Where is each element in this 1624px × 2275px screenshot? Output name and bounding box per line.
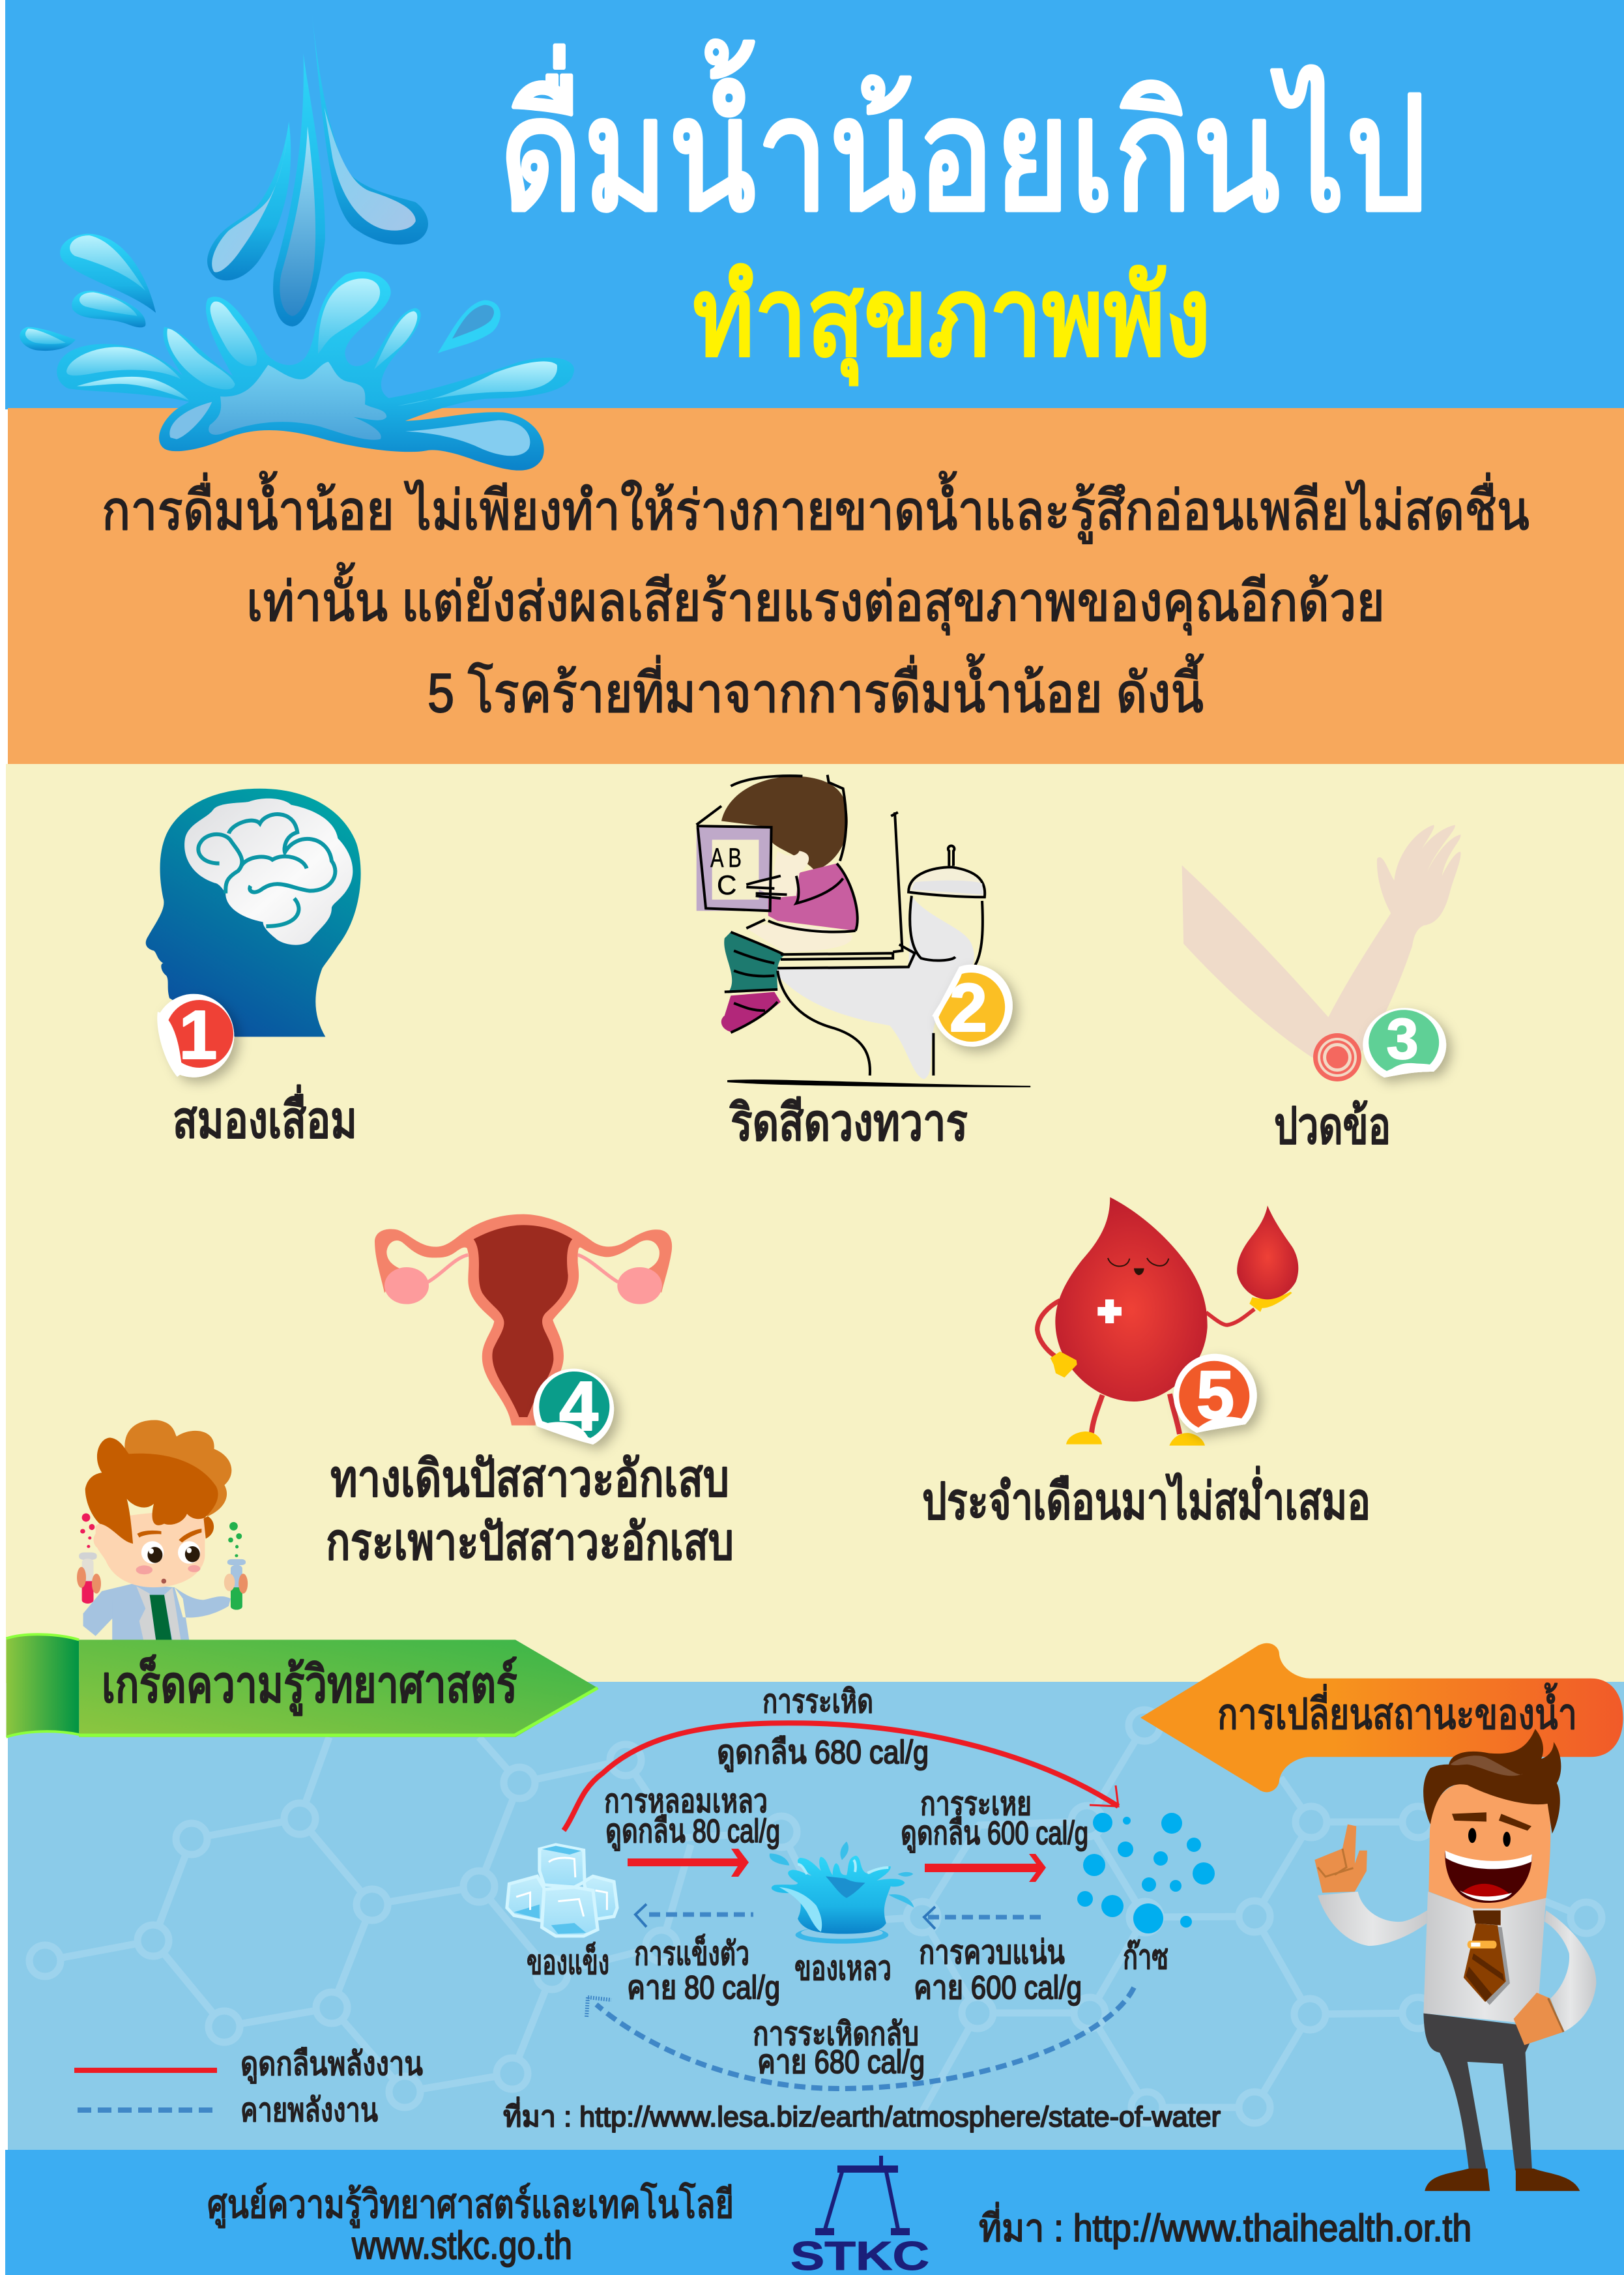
green science-fact banner	[7, 1634, 598, 1737]
icon: gas dots	[1077, 1813, 1215, 1933]
label: dementia: สมองเสื่อม	[173, 1085, 357, 1149]
diagram: melting arrow	[628, 1849, 749, 1877]
source text: ที่มา : http://www.lesa.biz/earth/atmosphere/state-of-water	[503, 2096, 1221, 2133]
diagram text: condensation: คาย 600 cal/g	[914, 1969, 1082, 2006]
background: light blue science panel	[8, 1682, 1624, 2151]
footer: organization name and website	[207, 2182, 734, 2267]
diagram: deposition dashed curve	[587, 1988, 1134, 2089]
background: cream disease panel	[6, 764, 1624, 1683]
icon: aching arm	[1182, 825, 1460, 1061]
icon: joint pain target	[1313, 1033, 1361, 1081]
diagram text: vaporization	[901, 1785, 1088, 1853]
icon: ice cubes	[507, 1845, 617, 1936]
badge 1: 1	[179, 997, 217, 1074]
badge 1	[157, 994, 234, 1078]
label: irregular menstruation: ประจำเดือนมาไม่สม่ำเสมอ	[922, 1467, 1370, 1530]
diagram: freezing dashed arrow	[635, 1904, 753, 1927]
diagram text: deposition: การระเหิดกลับ	[753, 2016, 919, 2052]
label: solid: ของแข็ง	[527, 1943, 609, 1982]
diagram text: melting: การหลอมเหลว	[604, 1783, 768, 1819]
diagram text: deposition: คาย 680 cal/g	[757, 2044, 925, 2080]
legend: คายพลังงาน	[240, 2092, 378, 2128]
diagram text: sublimation: ดูดกลืน 680 cal/g	[717, 1734, 929, 1772]
label: hemorrhoids: ริดสีดวงทวาร	[730, 1094, 968, 1151]
badge 5	[1174, 1354, 1257, 1433]
badge 2: 2	[950, 970, 987, 1046]
badge 4	[533, 1366, 614, 1445]
illustration: boy scientist	[77, 1420, 248, 1639]
background: orange intro panel	[8, 408, 1624, 764]
diagram text: freezing	[627, 1934, 780, 2006]
diagram: sublimation curved arrow	[564, 1723, 1118, 1830]
background: top blue header	[5, 0, 1624, 409]
orange heading arrow	[1140, 1643, 1623, 1792]
badge 3	[1363, 1006, 1446, 1078]
icon: head with brain	[146, 789, 361, 1037]
label: liquid: ของเหลว	[794, 1950, 892, 1988]
diagram text: sublimation: การระเหิด	[762, 1683, 873, 1720]
book letters: A B	[710, 842, 742, 873]
book letters	[710, 842, 742, 900]
badge 5: 5	[1196, 1357, 1234, 1433]
footer: organization name and website: ศูนย์ความรู้วิทยาศาสตร์และเทคโนโลยี	[207, 2182, 734, 2228]
diagram text: melting	[604, 1783, 780, 1851]
banner title: เกร็ดความรู้วิทยาศาสตร์	[102, 1655, 517, 1715]
title: ดื่มน้ำน้อยเกินไป	[499, 40, 1427, 244]
diagram text: sublimation	[717, 1683, 929, 1772]
icon: uterus	[375, 1214, 672, 1426]
diagram text: melting: ดูดกลืน 80 cal/g	[605, 1813, 780, 1851]
diagram: condensation dashed arrow	[924, 1907, 1042, 1929]
illustration: water splash	[20, 11, 574, 471]
legend	[74, 2046, 423, 2128]
badge 2	[932, 965, 1013, 1047]
icon: child reading on toilet	[697, 775, 1030, 1087]
footer: STKC logo	[790, 2156, 929, 2275]
diagram text: condensation	[914, 1934, 1082, 2006]
intro text block	[102, 471, 1530, 724]
diagram text: vaporization: ดูดกลืน 600 cal/g	[901, 1815, 1088, 1853]
footer: source link: ที่มา : http://www.thaihealth.or.th	[979, 2202, 1472, 2250]
book letters: C	[717, 870, 736, 900]
badge 3: 3	[1387, 1006, 1418, 1071]
icon: water splash small	[770, 1842, 914, 1944]
label: urinary tract infection: กระเพาะปัสสาวะอักเสบ	[326, 1513, 734, 1570]
intro text block: เท่านั้น แต่ยังส่งผลเสียร้ายแรงต่อสุขภาพของคุณอีกด้วย	[246, 563, 1385, 636]
diagram text: freezing: คาย 80 cal/g	[627, 1969, 780, 2006]
intro text block: 5 โรคร้ายที่มาจากการดื่มน้ำน้อย ดังนี้	[428, 654, 1204, 724]
label: joint pain: ปวดข้อ	[1274, 1097, 1391, 1154]
legend: ดูดกลืนพลังงาน	[240, 2046, 423, 2083]
label: urinary tract infection	[326, 1450, 734, 1570]
subtitle: ทำสุขภาพพัง	[693, 256, 1211, 386]
badge 4: 4	[559, 1366, 598, 1445]
footer: organization name and website: www.stkc.go.th	[351, 2224, 572, 2267]
icon: blood drop character	[1037, 1197, 1298, 1446]
decorative molecule lattice	[29, 1710, 1602, 2123]
diagram text: deposition	[753, 2016, 925, 2080]
label: gas: ก๊าซ	[1123, 1939, 1168, 1976]
illustration: businessman pointing	[1314, 1729, 1596, 2191]
diagram text: condensation: การควบแน่น	[919, 1934, 1065, 1971]
label: urinary tract infection: ทางเดินปัสสาวะอักเสบ	[330, 1450, 729, 1507]
diagram text: vaporization: การระเหย	[920, 1785, 1032, 1822]
background: footer blue band	[5, 2150, 1624, 2275]
diagram: vaporization arrow	[925, 1854, 1046, 1882]
diagram text: freezing: การแข็งตัว	[634, 1934, 749, 1972]
